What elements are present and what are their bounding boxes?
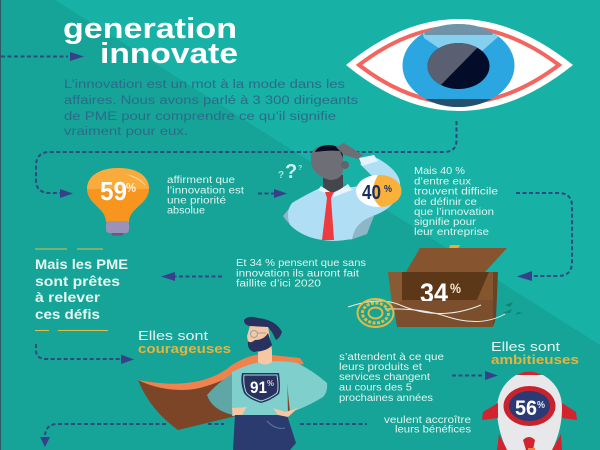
icon: question marks: ? bbox=[285, 161, 297, 183]
heading: mais les PME bbox=[35, 256, 128, 322]
text: mais 40 %: de définir ce bbox=[414, 197, 477, 208]
title bbox=[63, 13, 238, 70]
heading: mais les PME: à relever bbox=[35, 289, 101, 305]
heading: mais les PME: Mais les PME bbox=[35, 256, 128, 272]
arrow: to ambitieuses bbox=[452, 371, 498, 380]
intro text: L’innovation est un mot à la mode dans les bbox=[64, 79, 345, 91]
icon: question marks: ? bbox=[278, 170, 284, 181]
icon: thinking man 40%: 40 bbox=[362, 182, 381, 204]
icon: thinking man 40% bbox=[283, 143, 402, 241]
icon: question marks bbox=[278, 161, 302, 183]
text: affirment: affirment que bbox=[167, 175, 236, 186]
icon: question marks: ? bbox=[298, 165, 302, 172]
heading: ambitieuses: Elles sont bbox=[491, 339, 560, 354]
icon: eye bbox=[346, 19, 573, 111]
heading: courageuses: Elles sont bbox=[138, 328, 208, 343]
arrow: dashes from text bbox=[300, 423, 367, 425]
text: mais 40 %: que l’innovation bbox=[414, 207, 494, 218]
text: 34 % pensent bbox=[236, 258, 366, 290]
intro text bbox=[64, 79, 358, 138]
heading: courageuses: courageuses bbox=[138, 341, 231, 356]
heading: mais les PME: ces défis bbox=[35, 306, 100, 322]
heading: mais les PME: sont prêtes bbox=[35, 273, 120, 289]
illustration: rocket 56% bbox=[482, 372, 577, 450]
icon: open box 34%: 34 bbox=[420, 278, 448, 308]
divider lines bbox=[35, 248, 108, 331]
text: affirment: une priorité bbox=[167, 196, 227, 206]
text: affirment: absolue bbox=[167, 206, 205, 216]
text: s'attendent: prochaines années bbox=[339, 393, 433, 404]
text: s'attendent: s’attendent à ce que bbox=[339, 352, 444, 363]
arrow: to heading bbox=[161, 272, 222, 281]
icon: thinking man 40%: % bbox=[384, 184, 392, 195]
illustration: rocket 56%: % bbox=[537, 400, 545, 411]
arrow: heading to courageuses bbox=[36, 344, 134, 364]
text: 34 % pensent: faillite d’ici 2020 bbox=[236, 278, 322, 290]
title: innovate bbox=[100, 38, 238, 70]
title: generation bbox=[63, 13, 237, 45]
text: mais 40 %: trouvent difficile bbox=[414, 186, 499, 198]
heading: ambitieuses: ambitieuses bbox=[491, 352, 579, 367]
icon: light bulb 59%: % bbox=[126, 180, 136, 195]
text: veulent accroître bbox=[384, 415, 472, 436]
arrow: eye to bulb bbox=[36, 121, 456, 198]
icon: light bulb 59%: 59 bbox=[100, 176, 127, 206]
intro text: de PME pour comprendre ce qu’il signifie bbox=[64, 111, 336, 123]
heading: courageuses bbox=[138, 328, 231, 356]
text: s'attendent: leurs produits et bbox=[339, 362, 422, 373]
intro text: affaires. Nous avons parlé à 3 300 dirigeants bbox=[64, 95, 358, 107]
illustration: rocket 56%: 56 bbox=[515, 397, 537, 420]
icon: open box 34%: % bbox=[450, 280, 461, 296]
icon: gold mandala bbox=[358, 299, 394, 327]
illustration: hero 91%: % bbox=[267, 379, 274, 388]
arrow: bulb text to man bbox=[258, 189, 287, 198]
intro text: vraiment pour eux. bbox=[64, 126, 188, 138]
text: mais 40 %: d’entre eux bbox=[414, 176, 471, 188]
icon: light bulb 59% bbox=[87, 168, 149, 236]
illustration: hero 91% bbox=[138, 317, 327, 450]
text: affirment: l’innovation est bbox=[167, 186, 244, 196]
arrow: hero dashes down bbox=[40, 424, 224, 447]
icon: open box 34% bbox=[348, 245, 523, 327]
text: 34 % pensent: Et 34 % pensent que sans bbox=[236, 258, 366, 269]
text: mais 40 %: signifie pour bbox=[414, 217, 477, 228]
text: affirment bbox=[167, 175, 244, 216]
illustration: hero 91%: 91 bbox=[250, 378, 267, 397]
arrow: title bbox=[1, 52, 84, 61]
text: mais 40 % bbox=[414, 166, 499, 238]
text: 34 % pensent: innovation ils auront fait bbox=[236, 268, 359, 280]
text: s'attendent: au cours des 5 bbox=[339, 382, 412, 394]
text: mais 40 %: leur entreprise bbox=[414, 227, 490, 238]
arrow: man text to box bbox=[516, 193, 572, 281]
text: mais 40 %: Mais 40 % bbox=[414, 166, 465, 177]
text: s'attendent bbox=[339, 352, 444, 404]
text: s'attendent: services changent bbox=[339, 372, 430, 383]
text: veulent accroître: leurs bénéfices bbox=[395, 424, 471, 436]
text: veulent accroître: veulent accroître bbox=[384, 415, 472, 426]
heading: ambitieuses bbox=[491, 339, 579, 367]
